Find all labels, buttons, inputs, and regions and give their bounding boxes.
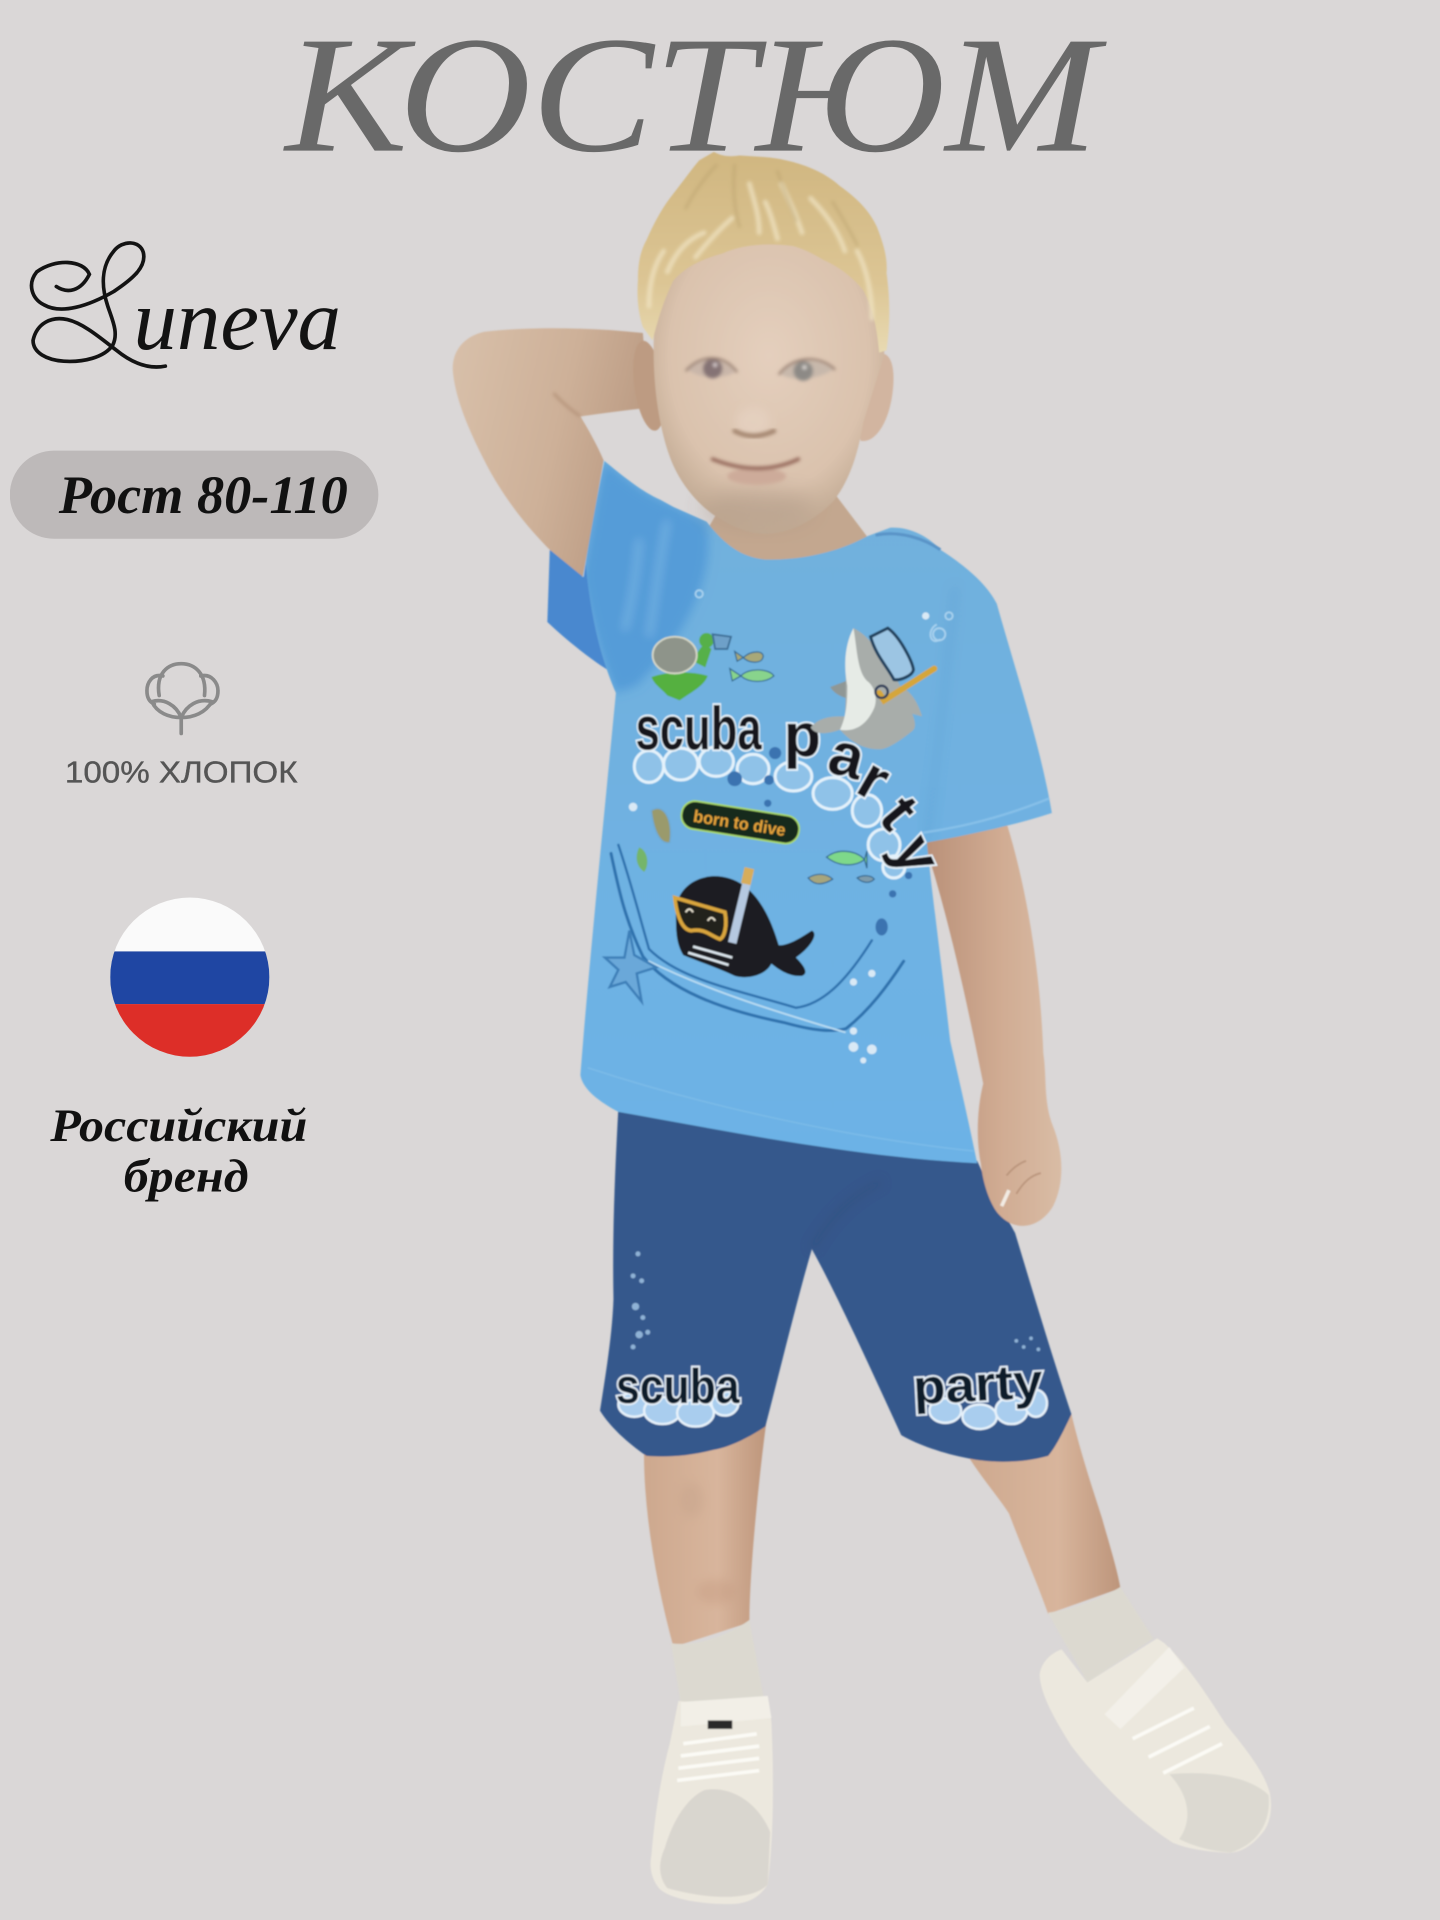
mouth bbox=[713, 459, 798, 485]
sleeve seam and hem bbox=[923, 798, 1049, 833]
shorts print left: scuba: scuba bbox=[616, 1360, 740, 1414]
back of raised sleeve bbox=[547, 550, 637, 680]
icon: small fish bbox=[637, 651, 874, 884]
brand logo bbox=[32, 243, 341, 368]
icon: turtle bbox=[651, 633, 731, 700]
bubbles bbox=[727, 747, 912, 936]
ears bbox=[628, 339, 894, 441]
neck bbox=[698, 496, 888, 576]
sleeve shading bbox=[583, 460, 955, 840]
shorts print right: party: party bbox=[912, 1355, 1044, 1415]
shorts print right: party bbox=[912, 1337, 1047, 1429]
shorts bbox=[600, 1108, 1071, 1462]
brand origin text: Российский bbox=[49, 1101, 307, 1152]
t-shirt bbox=[580, 460, 1052, 1163]
badge: born to dive: born to dive bbox=[692, 806, 787, 840]
brand origin text: бренд bbox=[124, 1151, 249, 1202]
icon: dolphin with snorkel bbox=[811, 628, 934, 749]
reflection of lettering bbox=[634, 747, 905, 878]
brand logo: uneva bbox=[133, 272, 341, 368]
height pill bbox=[10, 451, 378, 539]
icon: cotton bbox=[147, 664, 218, 733]
legs bbox=[644, 1414, 1120, 1647]
cotton label: 100% ХЛОПОК bbox=[65, 755, 298, 789]
right arm and hand bbox=[924, 823, 1061, 1226]
socks bbox=[671, 1587, 1153, 1704]
eyes bbox=[686, 358, 835, 381]
brand origin text bbox=[49, 1101, 307, 1202]
height pill: Рост 80-110 bbox=[58, 465, 348, 525]
hair bbox=[638, 152, 889, 353]
shorts print left: scuba bbox=[616, 1251, 740, 1427]
icon: whale with mask bbox=[675, 868, 814, 977]
title: КОСТЮМ bbox=[283, 4, 1107, 188]
icon: starfish bbox=[605, 931, 656, 1002]
boy wearing the suit bbox=[453, 152, 1271, 1904]
lettering: party: party bbox=[784, 702, 956, 884]
face bbox=[654, 227, 884, 534]
lettering: scuba: scuba bbox=[636, 694, 762, 762]
badge: born to dive bbox=[679, 799, 801, 846]
left shoe bbox=[651, 1696, 773, 1904]
raised arm bbox=[453, 328, 649, 577]
icon: russian flag bbox=[110, 898, 269, 1058]
right shoe bbox=[1040, 1638, 1271, 1853]
nose bbox=[735, 431, 774, 436]
shirt print bbox=[605, 590, 956, 1063]
water waves bbox=[611, 845, 904, 1032]
